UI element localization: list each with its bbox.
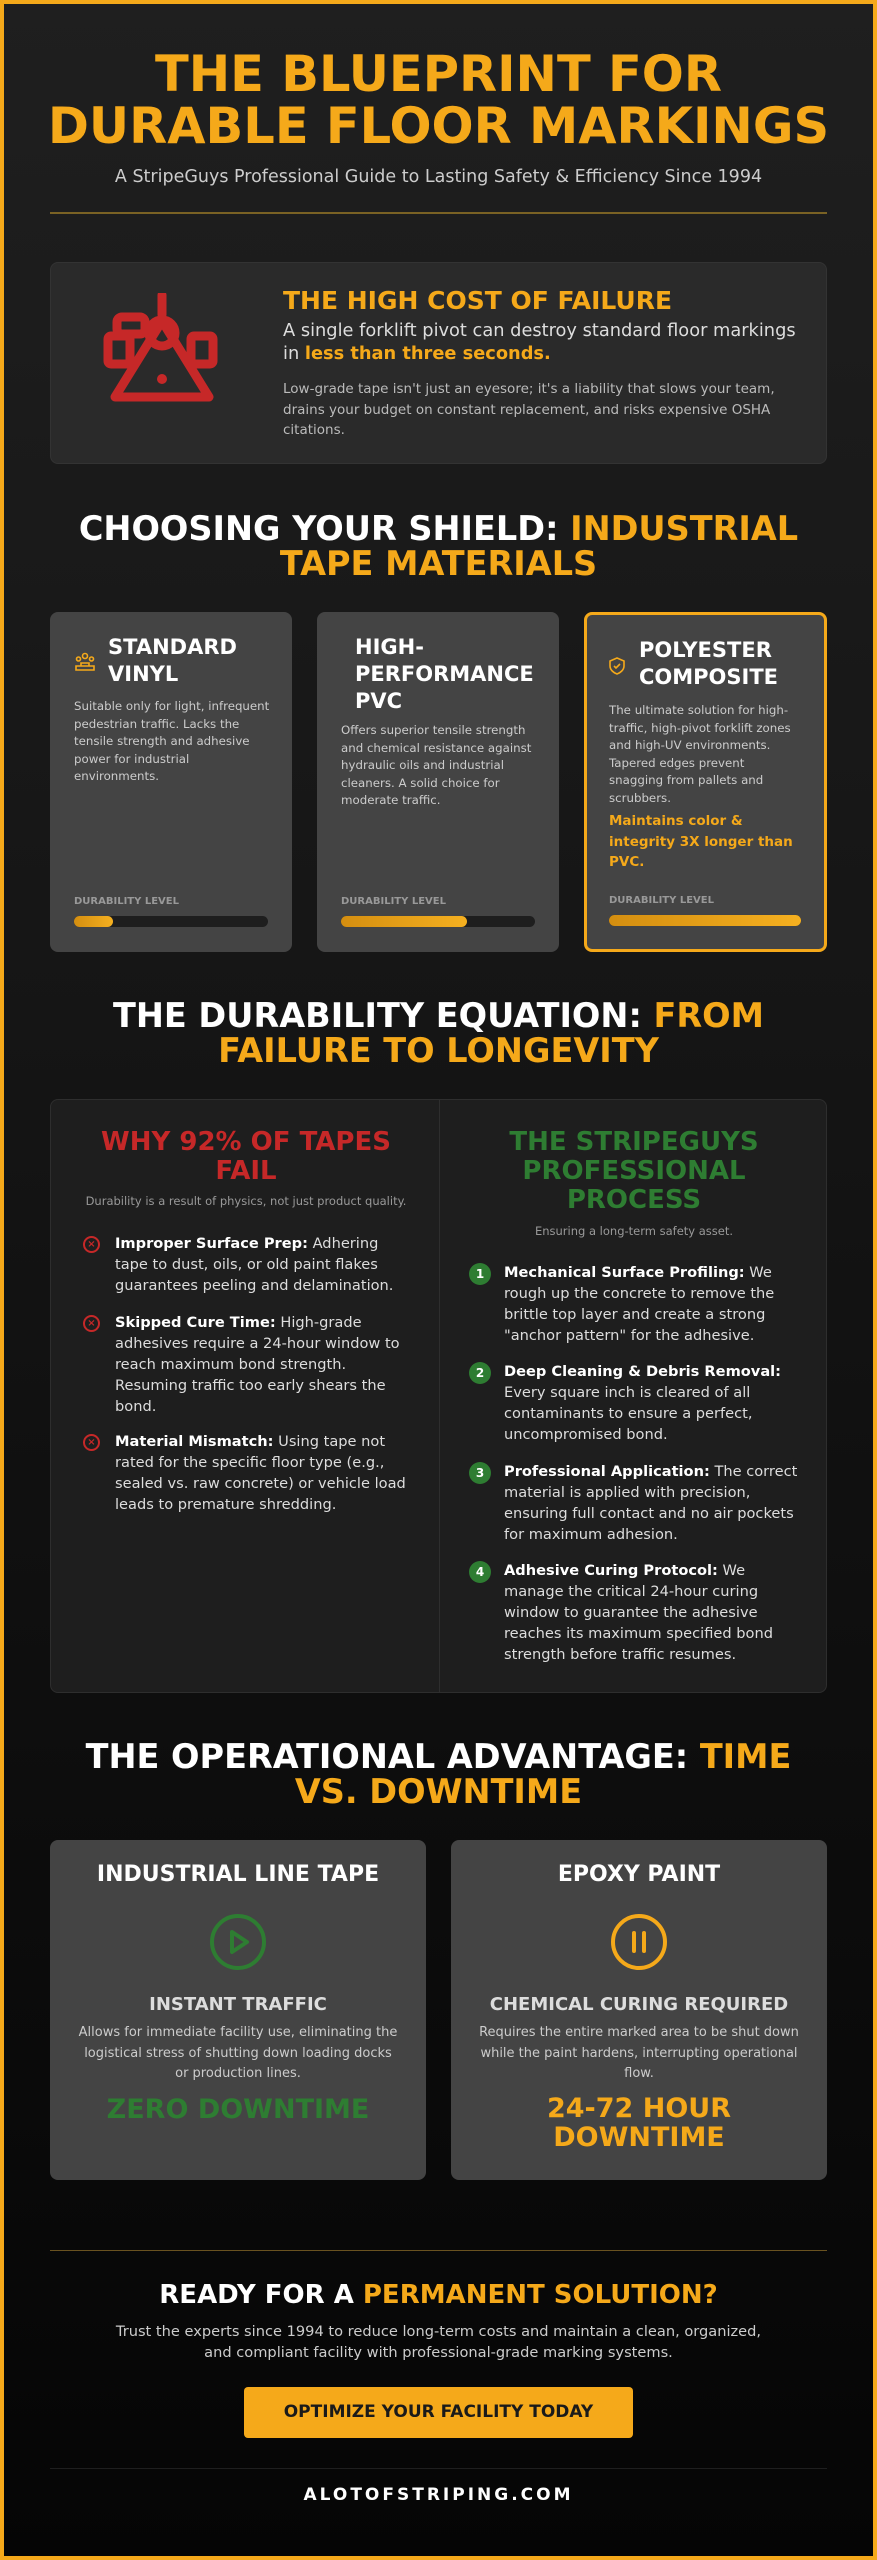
card: industrial line tape: INSTANT TRAFFIC	[149, 1994, 327, 2015]
icon: forklift warning	[104, 293, 218, 402]
card: industrial line tape	[50, 1840, 426, 2180]
title: THE BLUEPRINT FOR	[155, 45, 722, 103]
card: standard vinyl	[50, 612, 292, 952]
icon: people	[75, 652, 95, 671]
column: professional process	[469, 1127, 797, 1663]
item: surface prep: ×	[87, 1239, 96, 1250]
card: high-performance pvc: PERFORMANCE	[355, 662, 534, 686]
title: DURABLE FLOOR MARKINGS	[48, 97, 829, 155]
card: standard vinyl: Suitable only for light, infrequent pedestrian traffic. Lacks the tensile strength and adhesive power for industrial environments.	[74, 699, 269, 783]
stat: 24-72 HOUR	[547, 2093, 731, 2124]
card: standard vinyl: VINYL	[108, 662, 178, 686]
heading: durability equation: THE DURABILITY EQUATION: FROM FAILURE TO LONGEVITY	[113, 996, 764, 1070]
column: why tapes fail: Durability is a result of physics, not just product quality.	[86, 1194, 406, 1208]
card: high-performance pvc: PVC	[355, 689, 402, 713]
card: high-performance pvc: HIGH-	[355, 635, 424, 659]
bar: durability 65%	[341, 916, 535, 927]
step 2: 2	[476, 1366, 484, 1380]
body text: Low-grade tape isn't just an eyesore; it's a liability that slows your team, drains your budget on constant replacement, and risks expensive OSHA citations.	[283, 381, 775, 438]
item: mismatch: Material Mismatch: Using tape not rated for the specific floor type (e.g., sealed vs. raw concrete) or vehicle load leads to premature shredding.	[115, 1433, 406, 1513]
step 1: 1	[476, 1267, 484, 1281]
step 3: Professional Application: The correct material is applied with precision, ensuring full contact and no air pockets for maximum adhesion.	[504, 1463, 797, 1543]
card: epoxy paint: Requires the entire marked area to be shut down while the paint hardens, interrupting operational flow.	[479, 2025, 799, 2081]
step 4: Adhesive Curing Protocol: We manage the critical 24-hour curing window to guarantee the adhesive reaches its maximum specified bond strength before traffic resumes.	[504, 1562, 773, 1663]
icon: play	[210, 1914, 266, 1970]
heading: THE HIGH COST OF FAILURE	[283, 286, 672, 315]
step 3: 3	[476, 1466, 484, 1480]
column: professional process: PROCESS	[567, 1185, 701, 1215]
lead text: A single forklift pivot can destroy standard floor markings in less than three seconds.	[283, 320, 796, 364]
card: industrial line tape: Allows for immediate facility use, eliminating the logistical stress of shutting down loading docks or production lines.	[79, 2025, 397, 2081]
card: standard vinyl: STANDARD	[108, 635, 237, 659]
icon: shield check	[609, 657, 625, 675]
stat: ZERO DOWNTIME	[107, 2094, 369, 2125]
step 1: Mechanical Surface Profiling: We rough up the concrete to remove the brittle top layer and create a strong "anchor pattern" for the adhesive.	[504, 1264, 774, 1344]
step 2: Deep Cleaning & Debris Removal: Every square inch is cleared of all contaminants to ensure a perfect, uncompromised bond.	[504, 1363, 781, 1443]
card: polyester composite: The ultimate solution for high-traffic, high-pivot forklift zones and high-UV environments. Tapered edges prevent snagging from pallets and scrubbers.	[609, 703, 791, 804]
card: epoxy paint: CHEMICAL CURING REQUIRED	[490, 1994, 788, 2015]
button	[244, 2387, 633, 2438]
column: why tapes fail	[83, 1127, 406, 1513]
step 4: 4	[476, 1565, 484, 1579]
button: OPTIMIZE YOUR FACILITY TODAY	[284, 2402, 593, 2422]
item: cure time: ×	[87, 1318, 96, 1329]
card: high-performance pvc: Offers superior tensile strength and chemical resistance against hydraulic oils and industrial cleaners. A solid choice for moderate traffic.	[341, 723, 531, 807]
bar: durability 20%	[74, 916, 268, 927]
icon: pause	[611, 1914, 667, 1970]
card: industrial line tape: INDUSTRIAL LINE TAPE	[97, 1862, 379, 1887]
heading: operational advantage: THE OPERATIONAL ADVANTAGE: TIME VS. DOWNTIME	[86, 1737, 791, 1811]
item: surface prep: Improper Surface Prep: Adhering tape to dust, oils, or old paint flakes guarantees peeling and delamination.	[115, 1235, 393, 1294]
item: mismatch: ×	[87, 1437, 96, 1448]
card: polyester composite: COMPOSITE	[639, 665, 778, 689]
title	[48, 45, 829, 155]
cta text: and compliant facility with professional-grade marking systems.	[204, 2344, 673, 2361]
subtitle: A StripeGuys Professional Guide to Lasting Safety & Efficiency Since 1994	[115, 167, 762, 187]
cta text: Trust the experts since 1994 to reduce long-term costs and maintain a clean, organized,	[116, 2323, 761, 2340]
footer: ALOTOFSTRIPING.COM	[303, 2485, 574, 2505]
stat: DOWNTIME	[553, 2122, 725, 2153]
column: why tapes fail: FAIL	[215, 1156, 277, 1186]
card: polyester composite: DURABILITY LEVEL	[609, 895, 714, 906]
item: cure time: Skipped Cure Time: High-grade adhesives require a 24-hour window to reach maximum bond strength. Resuming traffic too early shears the bond.	[115, 1314, 400, 1415]
card: standard vinyl: DURABILITY LEVEL	[74, 896, 179, 907]
heading: choosing your shield: CHOOSING YOUR SHIELD: INDUSTRIAL TAPE MATERIALS	[79, 509, 798, 583]
bar: durability 100%	[609, 915, 801, 926]
column: why tapes fail: WHY 92% OF TAPES	[101, 1127, 391, 1157]
panel: high cost of failure	[50, 262, 827, 464]
panel: failure vs process	[50, 1099, 827, 1693]
cta text	[116, 2323, 761, 2361]
column: professional process: THE STRIPEGUYS	[509, 1127, 759, 1157]
cta heading: READY FOR A PERMANENT SOLUTION?	[159, 2280, 718, 2310]
card: epoxy paint	[451, 1840, 827, 2180]
highlight: Maintains color & integrity 3X longer than PVC.	[609, 813, 793, 870]
card: polyester composite	[584, 612, 827, 952]
column: professional process: PROFESSIONAL	[522, 1156, 746, 1186]
card: polyester composite: POLYESTER	[639, 638, 772, 662]
card: high-performance pvc: DURABILITY LEVEL	[341, 896, 446, 907]
card: high-performance pvc	[317, 612, 559, 952]
column: professional process: Ensuring a long-term safety asset.	[535, 1224, 733, 1238]
card: epoxy paint: EPOXY PAINT	[558, 1862, 720, 1887]
stat	[547, 2093, 731, 2153]
